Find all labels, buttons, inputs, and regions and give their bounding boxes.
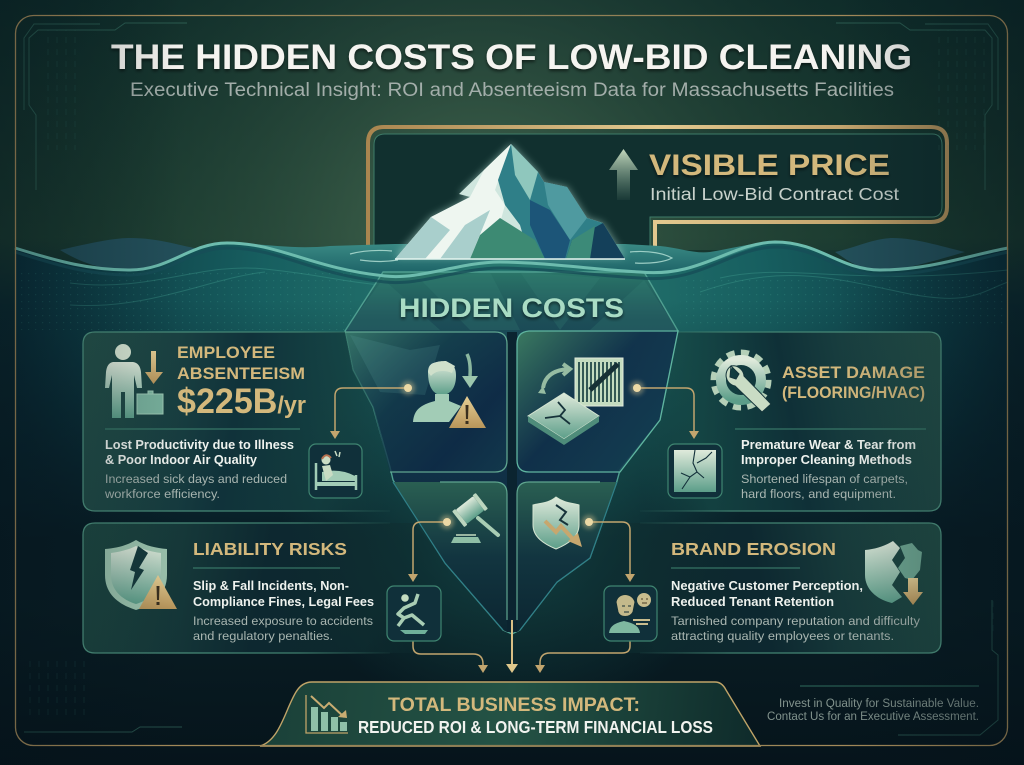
water surface plane xyxy=(227,242,775,277)
icon: gavel xyxy=(451,493,498,543)
call to action: Invest in Quality for Sustainable Value. xyxy=(779,696,979,710)
hidden costs heading: HIDDEN COSTS xyxy=(399,293,624,323)
ocean body xyxy=(0,238,1024,680)
heading: employee absenteeism: EMPLOYEE xyxy=(177,343,275,362)
panel: employee absenteeism xyxy=(83,332,410,511)
icon: shield with falling arrow xyxy=(533,497,582,549)
heading: brand erosion: BRAND EROSION xyxy=(671,539,836,559)
connector dots xyxy=(401,381,644,529)
panel: centre brand xyxy=(517,482,617,632)
heading: asset damage xyxy=(782,363,925,402)
impact detail: REDUCED ROI & LONG-TERM FINANCIAL LOSS xyxy=(358,717,713,737)
total business impact banner xyxy=(260,682,760,746)
call to action: Contact Us for an Executive Assessment. xyxy=(767,709,979,723)
text block: slip and fall: Slip & Fall Incidents, Non- xyxy=(193,579,349,593)
subheading: initial contract cost: Initial Low-Bid Contract Cost xyxy=(650,184,899,204)
text block: lost productivity xyxy=(104,438,294,501)
icon: gear and wrench xyxy=(714,353,771,412)
text block: slip and fall xyxy=(193,579,374,643)
text block: lost productivity: & Poor Indoor Air Quality xyxy=(105,453,257,467)
text block: premature wear: Shortened lifespan of carpets, xyxy=(741,472,908,486)
text block: negative perception: attracting quality employees or tenants. xyxy=(671,629,894,643)
front wave with ripples xyxy=(15,242,1008,283)
text block: negative perception: Negative Customer Perception, xyxy=(671,579,863,593)
panel: asset damage xyxy=(620,332,941,511)
text block: negative perception xyxy=(671,579,921,643)
icon box: unhappy customer xyxy=(604,586,657,641)
iceberg below water xyxy=(345,272,678,634)
title: THE HIDDEN COSTS OF LOW-BID CLEANING xyxy=(111,38,912,77)
icon: crumbling shield xyxy=(865,541,923,605)
text block: lost productivity: Lost Productivity due to Illness xyxy=(105,438,294,452)
heading: liability risks: LIABILITY RISKS xyxy=(193,539,347,559)
text block: lost productivity: workforce efficiency. xyxy=(104,487,220,501)
connector arrowheads xyxy=(330,431,699,673)
icon box: cracked surface xyxy=(668,444,722,498)
icon: damaged vent and cracked tile xyxy=(528,358,623,445)
text block: slip and fall: and regulatory penalties. xyxy=(193,629,333,643)
text block: negative perception: Reduced Tenant Retention xyxy=(671,595,834,609)
text block: negative perception: Tarnished company reputation and difficulty xyxy=(671,614,921,628)
heading: visible price: VISIBLE PRICE xyxy=(649,149,890,182)
heading: asset damage: ASSET DAMAGE xyxy=(782,363,925,382)
text block: premature wear: Improper Cleaning Methods xyxy=(741,453,912,467)
centre gap shadow xyxy=(507,332,517,632)
heading: asset damage: (FLOORING/HVAC) xyxy=(782,383,925,402)
heading: employee absenteeism xyxy=(177,343,305,383)
text block: lost productivity: Increased sick days and reduced xyxy=(105,472,287,486)
icon: person with briefcase xyxy=(105,344,163,418)
panel: centre absenteeism xyxy=(345,332,507,472)
text block: premature wear: hard floors, and equipment. xyxy=(741,487,896,501)
icon box: slip and fall xyxy=(387,586,441,641)
subtitle: Executive Technical Insight: ROI and Absenteeism Data for Massachusetts Facilities xyxy=(130,80,894,101)
panel: centre liability xyxy=(393,482,507,632)
text block: premature wear: Premature Wear & Tear from xyxy=(741,438,916,452)
connectors xyxy=(335,388,694,666)
icon box: sick in bed xyxy=(309,444,362,498)
impact heading: TOTAL BUSINESS IMPACT: xyxy=(388,695,640,716)
icon: cracked shield with warning xyxy=(105,540,177,610)
panel: centre asset damage xyxy=(517,331,678,472)
stat: 225 billion per year: $225B/yr xyxy=(177,382,306,421)
icon: person with warning xyxy=(413,354,486,428)
heading: employee absenteeism: ABSENTEEISM xyxy=(177,364,305,383)
text block: slip and fall: Compliance Fines, Legal Fees xyxy=(193,595,374,609)
panel: liability risks xyxy=(83,523,478,653)
icon: up arrow xyxy=(609,149,638,200)
icon: falling bar chart xyxy=(306,695,348,733)
panel: visible price xyxy=(609,149,899,204)
iceberg above water xyxy=(395,144,625,259)
text block: premature wear xyxy=(741,438,916,501)
text block: slip and fall: Increased exposure to accidents xyxy=(193,614,373,628)
panel: brand erosion xyxy=(545,523,941,653)
call to action xyxy=(767,686,979,723)
visible price box frame xyxy=(368,127,947,290)
